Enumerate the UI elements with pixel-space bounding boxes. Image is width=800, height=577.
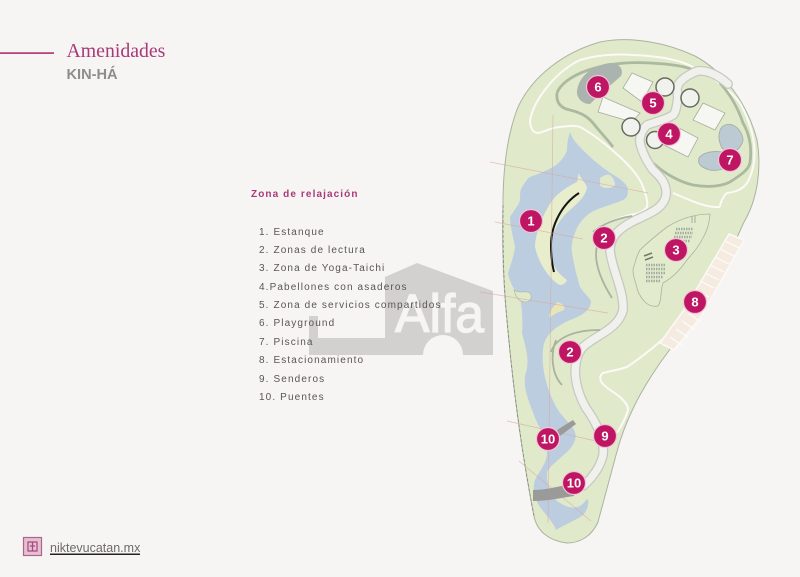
badge 8: 8 (691, 294, 699, 310)
badge 6: 6 (594, 80, 602, 94)
outer road (530, 55, 754, 227)
site map (480, 40, 759, 543)
footer link: niktevucatan.mx (50, 541, 141, 555)
list of amenities: 3. Zona de Yoga-Taichi (259, 263, 385, 274)
yoga zone (633, 214, 710, 306)
badge 10 lower (562, 472, 586, 494)
green inlet (514, 290, 531, 302)
badge 4: 4 (665, 126, 673, 142)
gravel path (575, 71, 728, 486)
pond (508, 132, 628, 530)
badge 10 lower: 10 (567, 476, 581, 490)
park outline (503, 40, 759, 543)
parking (660, 234, 744, 350)
badge 5: 5 (649, 96, 657, 110)
lower pond island (550, 302, 565, 318)
lower road (600, 320, 680, 433)
badge 9: 9 (601, 428, 609, 444)
pool (699, 124, 743, 170)
list of amenities: 10. Puentes (259, 392, 325, 403)
badge 10 upper: 10 (541, 432, 555, 446)
badge 3 (664, 238, 688, 262)
badge 7: 7 (726, 152, 734, 168)
small island (600, 175, 615, 188)
badge 2 lower (558, 340, 582, 364)
badge 7 (718, 148, 742, 172)
list of amenities: 9. Senderos (259, 374, 325, 385)
title: Amenidades (66, 40, 165, 62)
list of amenities: 8. Estacionamiento (259, 355, 364, 366)
badge 5 (642, 92, 664, 114)
bridges (533, 420, 576, 501)
list of amenities: 7. Piscina (259, 337, 314, 348)
list of amenities: 5. Zona de servicios compartidos (259, 300, 442, 311)
black arc (551, 193, 579, 272)
badge 1: 1 (527, 214, 535, 228)
list of amenities: 1. Estanque (259, 227, 325, 238)
badge 1 (520, 210, 542, 232)
green ring (557, 63, 751, 186)
survey section lines (480, 115, 648, 523)
badge 9 (594, 424, 616, 448)
watermark: Alfa house logo: Alfa (395, 284, 485, 344)
reading zone curves (551, 216, 632, 385)
badge 2 lower: 2 (566, 344, 574, 360)
list heading: Zona de relajación (251, 189, 359, 200)
island (535, 173, 587, 285)
subtitle: KIN-HÁ (66, 66, 118, 83)
badge 8 (684, 290, 706, 314)
dashed west boundary (503, 205, 534, 516)
pergolas (622, 78, 699, 148)
badge 4 (658, 122, 680, 146)
badge 2 upper (592, 226, 616, 250)
icon: footer logo (24, 538, 42, 556)
badge 2 upper: 2 (600, 230, 608, 246)
list of amenities: 6. Playground (259, 318, 335, 329)
badge 6 (586, 76, 610, 98)
badge 3: 3 (672, 242, 680, 258)
pavilions (598, 73, 725, 157)
header rule (0, 52, 54, 54)
list of amenities: 4.Pabellones con asaderos (259, 282, 408, 293)
list of amenities (259, 227, 442, 403)
playground (577, 63, 622, 104)
list of amenities: 2. Zonas de lectura (259, 245, 366, 256)
badge 10 upper (536, 428, 560, 450)
watermark: Alfa house logo (309, 263, 493, 355)
